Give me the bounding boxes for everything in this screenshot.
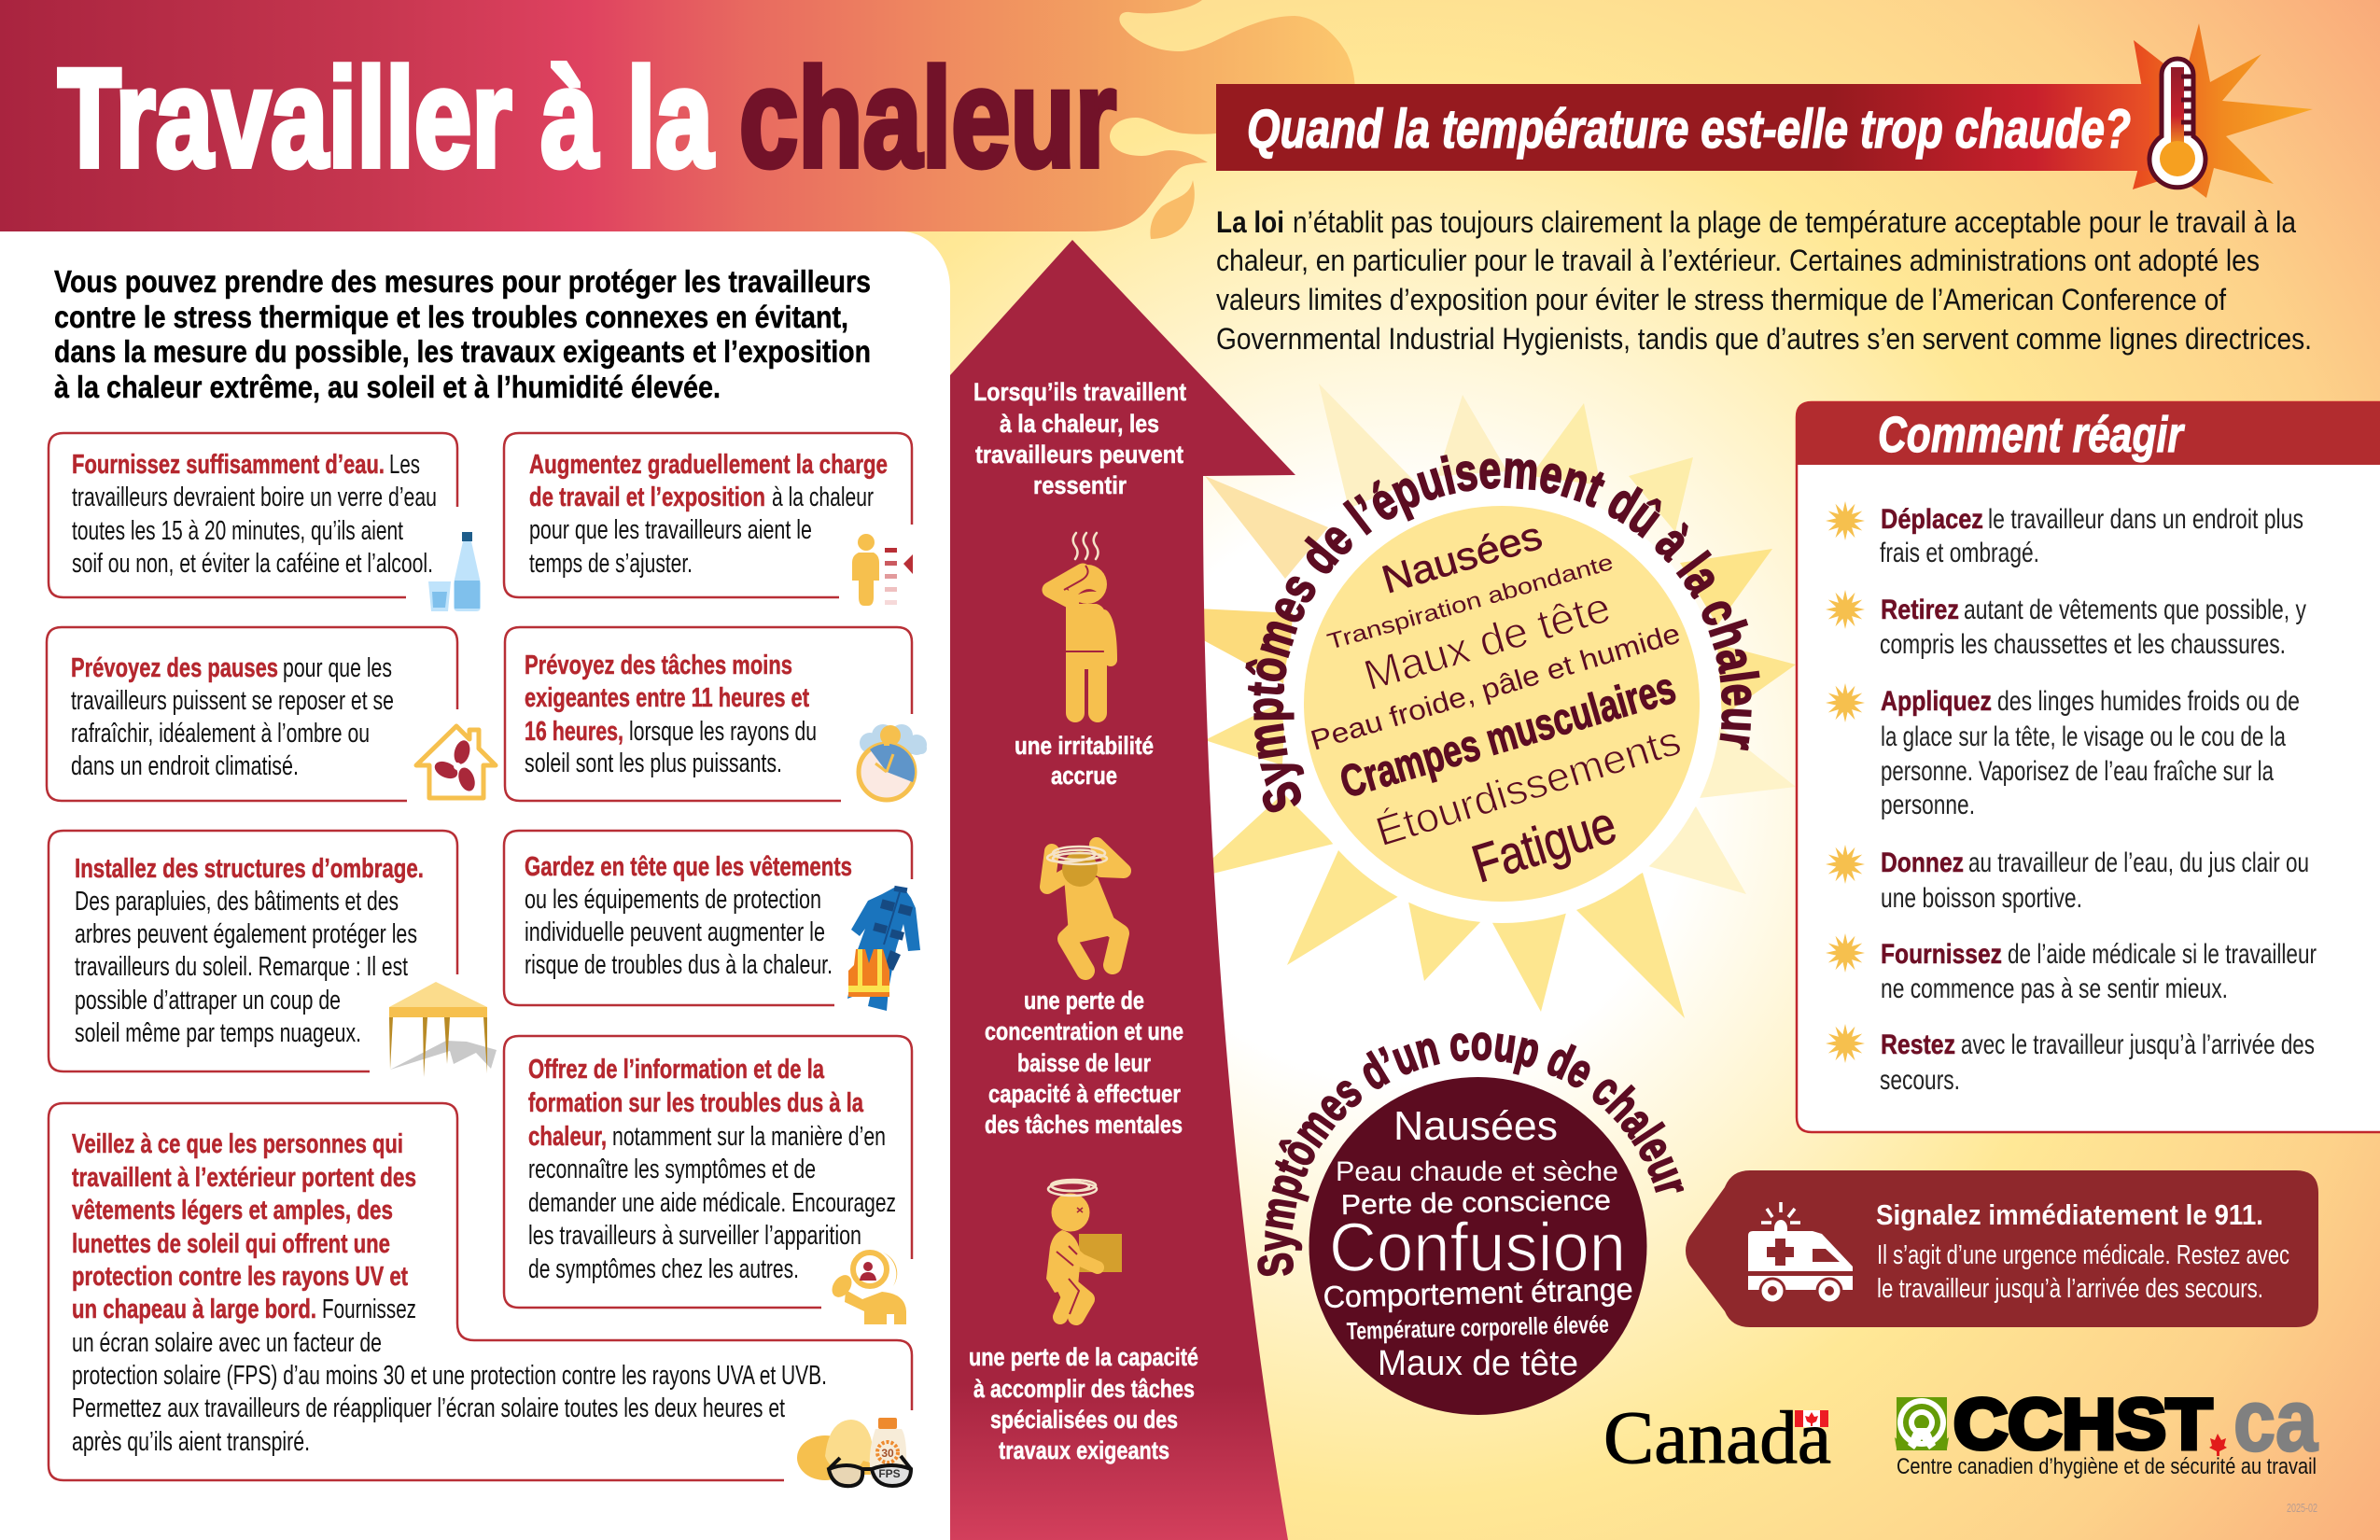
card: information et formation: de symptômes chez les autres. [528,1254,799,1284]
icon: sun hat, sunscreen and sunglasses: FPS [878,1467,901,1480]
step: appliquez: Appliquez [1881,686,1992,717]
card: tâches moins exigeantes: 16 heures, [525,717,623,747]
card: vêtements: individuelle peuvent augmenter le [525,917,825,947]
logo: CCHST.ca: CCHST [1953,1385,2212,1464]
card: structures d'ombrage: soleil même par temps nuageux. [75,1018,361,1048]
paragraph: la loi [1216,205,2312,356]
step: appliquez: personne. [1881,790,1975,820]
card: eau: Les [389,450,420,480]
sun disc: symptoms of heat exhaustion: Fatigue [1465,794,1623,894]
card: eau: Fournissez suffisamment d’eau. [72,450,385,480]
step: déplacez [1826,501,2303,568]
card: vêtements: risque de troubles dus à la chaleur. [525,950,833,980]
card: structures d'ombrage: Installez des structures d’ombrage. [75,854,424,884]
card: information et formation: formation sur les troubles dus à la [528,1088,864,1118]
card: eau: soif ou non, et éviter la caféine et l’alcool. [72,549,433,579]
text: irritabilité: accrue [1051,762,1117,790]
callout text [1876,1198,2289,1304]
heat stroke disc: Température corporelle élevée [1346,1310,1609,1345]
sun disc: symptoms of heat exhaustion: Crampes musculaires [1335,664,1681,808]
figure: dizzy worker [1047,845,1124,971]
step: déplacez: frais et ombragé. [1880,538,2039,568]
step: restez: secours. [1880,1065,1960,1096]
text: perte de capacité [969,1343,1198,1464]
card: vêtements [504,831,920,1011]
step: fournissez [1826,933,2317,1004]
sun disc: symptoms of heat exhaustion [1282,484,1721,923]
arrow heading [973,378,1186,499]
icon: ambulance [1748,1202,1853,1303]
card: tâches moins exigeantes [505,627,927,801]
step: restez [1826,1024,2315,1096]
card: vêtements: ou les équipements de protection [525,885,821,915]
paragraph: la loi: La loi [1216,205,1284,239]
icon: person and gauge [852,534,913,606]
text: perte de concentration: baisse de leur [1017,1049,1151,1077]
logo: CCHST.ca [1895,1371,2318,1479]
header flame band [0,0,1355,239]
step: restez: Restez [1881,1029,1955,1060]
arrow heading: Lorsqu’ils travaillent [973,378,1186,406]
logo: CCHST.ca: ca [2233,1371,2318,1469]
callout text: le travailleur jusqu’à l’arrivée des secours. [1877,1274,2263,1304]
icon: person with magnifier [828,1253,906,1324]
card: tâches moins exigeantes: Prévoyez des tâches moins [525,651,792,680]
banner heading: Quand la température est-elle trop chaude? [1247,99,2131,160]
panel: comment réagir [1797,402,2380,1132]
icon: house with fan [416,726,496,798]
title: Travailler à la [58,39,714,196]
figure: irritated worker [1050,533,1111,722]
card: information et formation: chaleur, [528,1122,607,1152]
card: eau: toutes les 15 à 20 minutes, qu’ils aient [72,516,403,546]
step: fournissez: Fournissez [1881,939,2002,970]
card: vêtements légers et écran solaire: Permettez aux travailleurs de réappliquer l’écran solaire toutes les deux heures et [72,1393,785,1423]
step: fournissez: ne commence pas à se sentir mieux. [1881,973,2228,1004]
card: tâches moins exigeantes: exigeantes entre 11 heures et [525,683,809,713]
paragraph: la loi: chaleur, en particulier pour le travail à l’extérieur. Certaines administrations ont adopté les [1216,244,2260,277]
card: charge de travail: de travail et l’exposition [529,483,765,512]
step: appliquez [1826,683,2300,820]
card: information et formation [504,1036,912,1324]
panel: white left panel [0,231,950,1540]
card: vêtements légers et écran solaire: protection solaire (FPS) d’au moins 30 et une protection contre les rayons UVA et UVB. [72,1361,827,1391]
step: donnez [1826,845,2309,914]
card: pauses: dans un endroit climatisé. [71,751,299,781]
text: irritabilité: une irritabilité [1015,732,1154,760]
step: donnez: Donnez [1881,847,1964,878]
step: retirez: Retirez [1881,595,1959,625]
callout: call 911 [1686,1170,2318,1327]
heat stroke disc: Perte de conscience [1341,1185,1611,1221]
card: charge de travail: pour que les travailleurs aient le [529,515,812,545]
heat stroke disc [1309,1077,1646,1415]
text: perte de concentration: des tâches mentales [985,1111,1183,1139]
text: perte de concentration [985,987,1183,1139]
card: vêtements légers et écran solaire: protection contre les rayons UV et [72,1262,408,1292]
card: vêtements légers et écran solaire: Veillez à ce que les personnes qui [72,1129,403,1159]
intro paragraph [54,264,871,404]
sun disc: symptoms of heat exhaustion: Maux de tête [1358,582,1616,700]
card: vêtements légers et écran solaire: un écran solaire avec un facteur de [72,1328,382,1358]
card: information et formation: demander une aide médicale. Encouragez [528,1188,896,1218]
card: charge de travail: Augmentez graduellement la charge [529,450,888,480]
heat stroke disc: Nausées [1393,1103,1558,1149]
card: tâches moins exigeantes: lorsque les rayons du [629,717,817,747]
heat stroke disc: Comportement étrange [1323,1271,1633,1314]
card: information et formation: les travailleurs à surveiller l’apparition [528,1221,861,1251]
card: structures d'ombrage: arbres peuvent également protéger les [75,919,417,949]
text: perte de capacité: à accomplir des tâches [973,1375,1195,1403]
card: vêtements légers et écran solaire [49,1103,912,1486]
icon: water bottle and glass [428,532,481,611]
card: pauses: Prévoyez des pauses [71,653,278,683]
figure: worker carrying box [1046,1180,1122,1317]
card: vêtements légers et écran solaire: un chapeau à large bord. [72,1295,316,1324]
central arrow [950,240,1295,1540]
logo: Canada wordmark: Canada [1603,1397,1831,1479]
text: perte de concentration: concentration et une [985,1017,1183,1045]
intro paragraph: contre le stress thermique et les troubles connexes en évitant, [54,300,848,334]
text: perte de capacité: spécialisées ou des [990,1406,1178,1434]
arrow heading: ressentir [1033,471,1127,499]
text: perte de capacité: une perte de la capacité [969,1343,1198,1371]
card: pauses [47,627,496,801]
card: vêtements légers et écran solaire: lunettes de soleil qui offrent une [72,1229,390,1259]
step: déplacez: Déplacez [1881,504,1983,535]
intro paragraph: Vous pouvez prendre des mesures pour protéger les travailleurs [54,264,871,299]
card: information et formation: Offrez de l’information et de la [528,1055,825,1085]
callout text: Signalez immédiatement le 911. [1876,1198,2263,1231]
card: pauses: rafraîchir, idéalement à l’ombre ou [71,719,370,749]
sun disc: symptoms of heat exhaustion: Étourdissements [1370,718,1687,856]
date code: 2025-02 [2287,1501,2317,1515]
text: irritabilité [1015,732,1154,790]
step: retirez [1826,590,2306,660]
icon: sun hat, sunscreen and sunglasses [797,1418,911,1486]
card: eau [49,433,481,611]
arc heading: symptômes de l'épuisement: Symptômes de l’épuisement dû à la chaleur [1245,455,1760,812]
sun disc: symptoms of heat exhaustion: Peau froide, pâle et humide [1308,618,1684,757]
starburst and thermometer [1216,23,2313,198]
text: perte de capacité: travaux exigeants [999,1436,1169,1464]
card: information et formation: notamment sur la manière d’en [612,1122,886,1152]
step: donnez: une boisson sportive. [1881,883,2082,914]
heat stroke disc: Confusion [1329,1209,1626,1286]
text: perte de concentration: une perte de [1024,987,1144,1015]
card: charge de travail [504,433,913,606]
card: charge de travail: temps de s’ajuster. [529,549,693,579]
arrow heading: travailleurs peuvent [975,441,1183,469]
card: information et formation: reconnaître les symptômes et de [528,1155,816,1184]
icon: coveralls and safety vest [847,886,920,1011]
heat stroke disc: Peau chaude et sèche [1336,1156,1618,1187]
icon: shade tent [389,982,497,1077]
card: pauses: pour que les [283,653,392,683]
arc heading: symptômes d'un coup de chaleur: Symptômes d’un coup de chaleur [1257,1032,1684,1277]
step: appliquez: des linges humides froids ou de [1997,686,2300,717]
card: vêtements légers et écran solaire: après qu’ils aient transpiré. [72,1427,310,1457]
card: vêtements légers et écran solaire: vêtements légers et amples, des [72,1196,393,1225]
card: structures d'ombrage [49,831,497,1077]
card: eau: travailleurs devraient boire un verre d’eau [72,483,437,512]
sun disc: symptoms of heat exhaustion: Transpiration abondante [1324,550,1617,655]
title: chaleur [739,39,1116,196]
card: structures d'ombrage: travailleurs du soleil. Remarque : Il est [75,952,408,982]
intro paragraph: à la chaleur extrême, au soleil et à l’humidité élevée. [54,370,721,404]
intro paragraph: dans la mesure du possible, les travaux exigeants et l’exposition [54,334,871,369]
paragraph: la loi: valeurs limites d’exposition pour éviter le stress thermique de l’American Conference of [1216,283,2226,316]
card: charge de travail: à la chaleur [772,483,874,512]
card: pauses: travailleurs puissent se reposer et se [71,686,394,716]
card: structures d'ombrage: possible d’attraper un coup de [75,986,341,1015]
heat stroke disc: Maux de tête [1378,1344,1578,1383]
card: vêtements légers et écran solaire: Fournissez [322,1295,416,1324]
icon: sun hat, sunscreen and sunglasses: 30 [881,1447,894,1460]
sun disc: symptoms of heat exhaustion: Nausées [1377,513,1547,602]
card: vêtements légers et écran solaire: travaillent à l’extérieur portent des [72,1163,416,1193]
sun rays [1140,384,1796,1018]
arrow heading: à la chaleur, les [1000,410,1159,438]
panel heading: Comment réagir [1878,407,2185,463]
icon: clock, sun and cloud [859,724,927,800]
text: perte de concentration: capacité à effectuer [988,1080,1181,1108]
card: vêtements: Gardez en tête que les vêtements [525,852,852,882]
card: structures d'ombrage: Des parapluies, des bâtiments et des [75,887,399,917]
card: tâches moins exigeantes: soleil sont les plus puissants. [525,749,782,778]
